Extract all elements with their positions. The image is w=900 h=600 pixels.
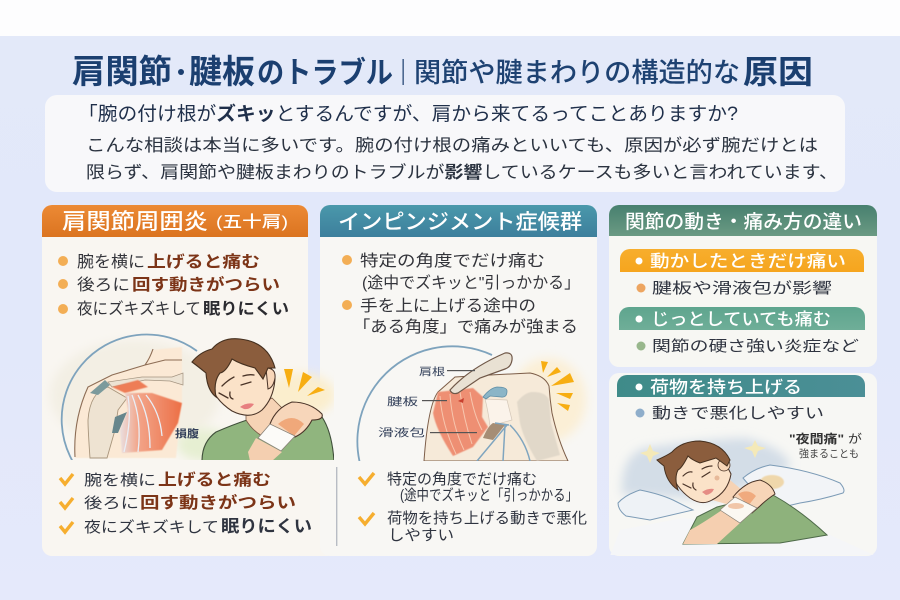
humerus — [88, 387, 127, 458]
anatomy labels: 肩根 — [419, 365, 446, 378]
note text: 強まることも — [799, 447, 859, 460]
man: body — [683, 495, 827, 544]
gutter fill between left and centre panels — [300, 396, 328, 556]
header: 関節の動き・痛み方の違い — [625, 211, 862, 233]
shoulder anatomy — [75, 347, 183, 458]
symptom bullets: 後ろに — [77, 276, 130, 294]
label: 損腹: 損腹 — [175, 427, 200, 440]
top white band — [0, 0, 900, 36]
header: 肩関節周囲炎: 肩関節周囲炎 — [62, 209, 208, 234]
stars — [640, 440, 766, 463]
note text: "夜間痛" が — [789, 431, 862, 446]
title: 関節や腱まわりの構造的な — [414, 58, 740, 88]
intro question: 「腕の付け根が ズキッとするんですが、肩から来てるってことありますか? — [78, 102, 738, 125]
pain rays — [541, 361, 574, 411]
symptom bullets: 夜にズキズキして — [77, 300, 201, 318]
pillows — [618, 465, 844, 520]
panel: 肩関節周囲炎 — [42, 205, 312, 556]
wash — [52, 342, 218, 436]
man: hand — [270, 402, 322, 437]
header — [609, 205, 877, 236]
illustration: sleeping man — [610, 438, 876, 556]
checklist: right: 特定の角度でだけ痛む — [387, 471, 537, 488]
acromion — [450, 353, 512, 394]
checklist: left: 後ろに — [84, 495, 139, 512]
sub-block header — [617, 375, 865, 397]
night wash — [622, 438, 790, 500]
sub-block: 動かしたときだけ痛い: 腱板や滑液包が影響 — [652, 280, 832, 297]
symptom bullets — [342, 252, 580, 336]
checklist: left: 上げると痛む — [158, 470, 271, 489]
man: face details — [683, 466, 712, 490]
symptom bullets: 眠りにくい — [203, 300, 289, 318]
header: インピンジメント症候群 — [320, 205, 597, 237]
symptom bullets: 特定の角度でだけ痛む — [360, 252, 545, 270]
blanket — [610, 553, 873, 555]
panel: インピンジメント症候群 — [320, 205, 597, 556]
intro body line 2: 限らず、肩関節や腱板まわりのトラブルが 影響しているケースも多いと言われています、 — [86, 162, 838, 182]
symptom bullets: 上げると痛む — [147, 252, 260, 271]
sub-block: じっとしていても痛む: じっとしていても痛む — [651, 310, 831, 329]
white tendon — [485, 399, 512, 426]
note text — [789, 431, 862, 460]
anatomy labels: 腱板 — [387, 395, 419, 408]
checklist: left — [60, 470, 312, 536]
anatomy labels: 滑液包 — [378, 426, 425, 439]
man: forearm — [248, 438, 282, 461]
checklist: right — [359, 471, 587, 544]
sub-block: 動かしたときだけ痛い: 動かしたときだけ痛い — [650, 252, 846, 271]
checklist: right: 荷物を持ち上げる動きで悪化 — [387, 510, 587, 527]
illustration: shoulder anatomy and man in pain — [52, 334, 334, 460]
dark bone shade — [483, 423, 505, 440]
title — [72, 53, 813, 90]
man: hand — [733, 480, 775, 513]
sub-block: 動かしたときだけ痛い — [620, 249, 864, 297]
man: wristband — [720, 497, 757, 523]
circle outline — [356, 345, 492, 461]
anatomy labels — [378, 365, 477, 439]
man: neck — [712, 480, 740, 504]
title: 原因 — [743, 54, 813, 90]
header: インピンジメント症候群: インピンジメント症候群 — [338, 211, 582, 234]
checklist: right: (途中でズキッと「引っかかる」 — [400, 487, 578, 504]
checklist divider — [336, 467, 337, 546]
title: のトラブル — [257, 56, 393, 90]
man: head — [216, 360, 276, 416]
symptom bullets: (途中でズキッと"引っかかる」 — [362, 274, 580, 292]
humeral bone — [517, 392, 560, 461]
checklist: left: 回す動きがつらい — [140, 493, 296, 512]
symptom bullets: 回す動きがつらい — [132, 275, 280, 294]
muscle — [112, 380, 148, 393]
header: 肩関節周囲炎: (五十肩) — [216, 213, 288, 231]
sub-block row: 動きで悪化しやすい — [652, 405, 824, 422]
checklist: left: 夜にズキズキして — [84, 519, 219, 536]
symptom bullets: 「ある角度」で痛みが強まる — [353, 318, 578, 336]
man: neck — [246, 398, 284, 436]
symptom bullets: 腕を横に — [77, 253, 145, 271]
man: face details — [219, 375, 254, 399]
pain rays — [284, 369, 325, 396]
nerves — [477, 423, 530, 461]
man: head — [670, 456, 731, 503]
sub-block: じっとしていても痛む: 関節の硬さ強い炎症など — [652, 338, 859, 355]
symptom bullets — [58, 252, 289, 318]
man: wristband — [258, 424, 295, 451]
checklist: left: 腕を横に — [84, 472, 156, 489]
panel: 関節の動き・痛み方の違い — [609, 205, 877, 367]
man: hair — [192, 339, 275, 397]
circle outline — [60, 334, 198, 460]
sub-block header: 荷物を持ち上げる — [650, 378, 802, 397]
title: 肩関節 — [72, 53, 172, 90]
man: body — [202, 417, 334, 461]
title: 腱板 — [189, 53, 255, 90]
illustration: impingement anatomy — [356, 345, 588, 461]
panel: intro — [45, 95, 845, 192]
panel: 荷物を持ち上げる — [609, 373, 877, 556]
shoulder body — [424, 373, 568, 461]
checklist: right: しやすい — [388, 527, 454, 544]
symptom bullets: 手を上に上げる途中の — [360, 297, 536, 315]
checklist: left: 眠りにくい — [221, 517, 312, 536]
man: hair — [657, 441, 730, 490]
muscle — [433, 388, 488, 456]
header: 肩関節周囲炎 — [42, 205, 308, 237]
bursa — [483, 387, 507, 399]
sub-block: じっとしていても痛む — [619, 307, 865, 355]
intro body line 1: こんな相談は本当に多いです。腕の付け根の痛みといいても、原因が必ず腕だけとは — [86, 136, 818, 155]
man: forearm — [683, 510, 740, 544]
